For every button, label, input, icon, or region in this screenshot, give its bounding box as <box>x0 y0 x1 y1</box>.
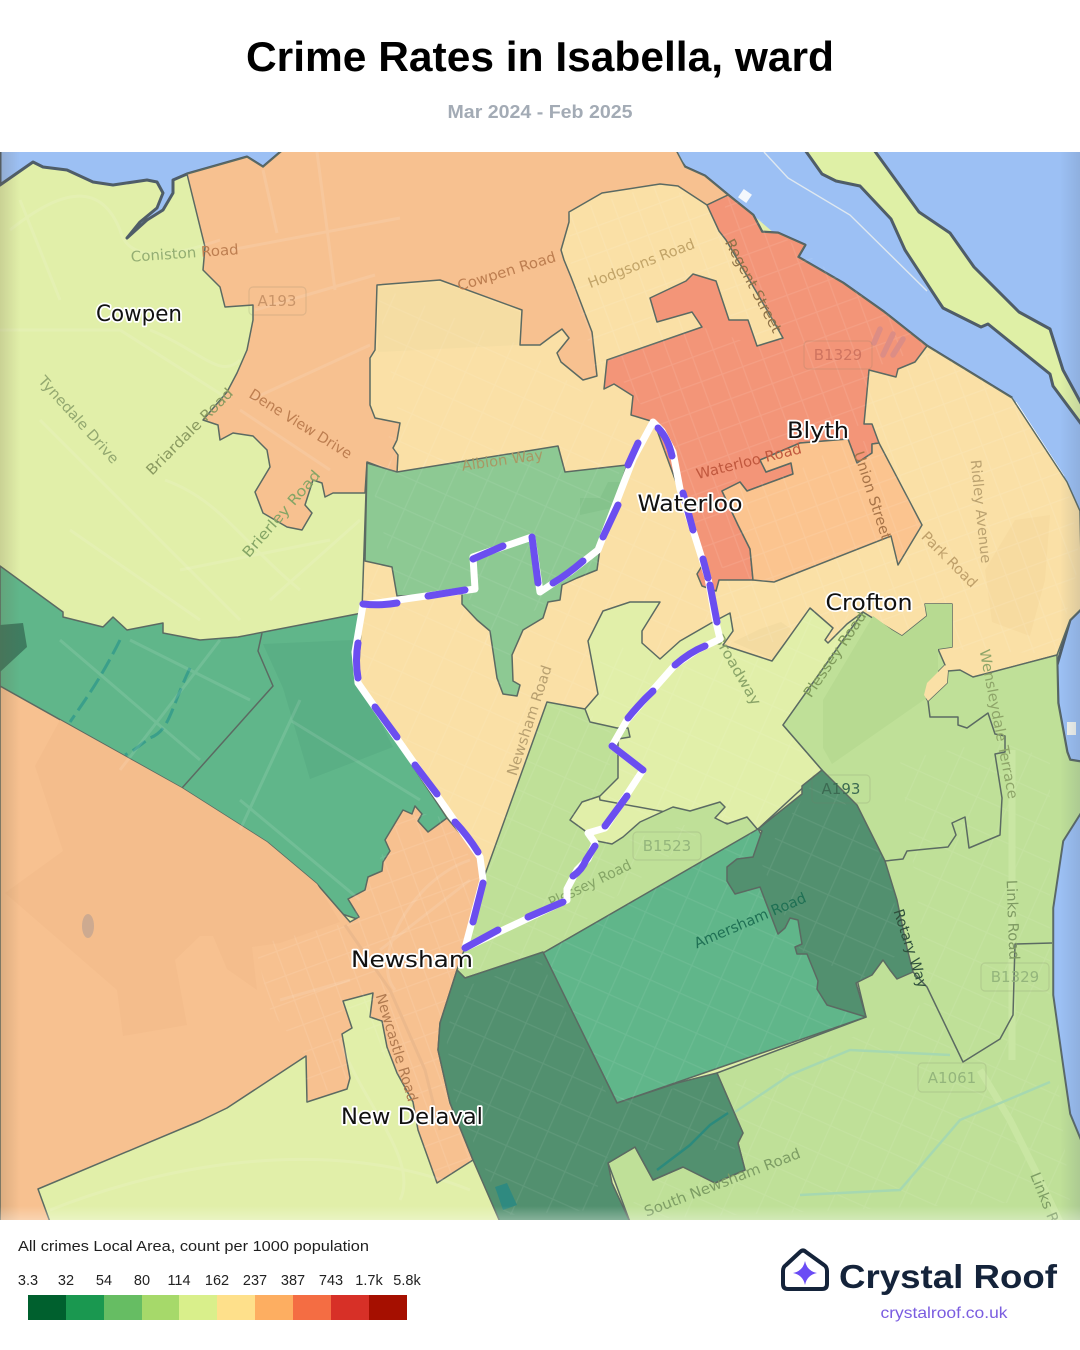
legend tick labels: 743 <box>319 1273 343 1289</box>
road: Union Street: Union Street <box>850 450 894 542</box>
pale darker patch: Crofton <box>733 622 791 660</box>
white outline <box>355 422 720 948</box>
legend tick labels: 114 <box>167 1273 191 1289</box>
region: green Amersham <box>543 829 866 1103</box>
road: Amersham Road: Amersham Road <box>692 891 809 952</box>
road badge: B1329 east: B1329 <box>991 968 1039 986</box>
light green darker block <box>823 604 952 764</box>
darkest west spot <box>0 623 27 672</box>
teal pond <box>495 1183 517 1210</box>
region: orange south-west Newsham <box>0 686 483 1222</box>
road badge: A1061: A1061 <box>928 1069 976 1087</box>
breakwater <box>1015 403 1063 477</box>
notch of pale <box>924 665 948 701</box>
road badge: A193 west <box>249 287 306 315</box>
road: Newsham Road: Newsham Road <box>505 664 556 778</box>
coast line <box>674 152 1012 398</box>
pier block east <box>1067 722 1076 735</box>
region: lime central <box>585 602 863 829</box>
legend tick labels: 387 <box>281 1273 305 1289</box>
region: dark green west wards <box>0 566 450 950</box>
legend tick labels: 1.7k <box>355 1273 383 1289</box>
east dark streets <box>760 770 905 980</box>
boundary inside east region <box>885 701 1005 861</box>
region: orange Cowpen <box>187 150 728 530</box>
legend <box>18 1239 421 1320</box>
water east bottom <box>1053 811 1080 1143</box>
boundary Links road <box>913 943 1052 1062</box>
road badge: A193 east: A193 <box>822 780 860 798</box>
stream south dark <box>657 1113 728 1170</box>
salmon street pattern <box>607 195 927 580</box>
orange road: Newcastle Road band <box>345 925 440 1130</box>
legend tick labels: 162 <box>205 1273 229 1289</box>
road badge: A193 east <box>812 775 870 803</box>
pale darker patch: east park <box>985 515 1050 636</box>
legend tick labels: 5.8k <box>393 1273 421 1289</box>
river: north-west inlet <box>0 150 283 238</box>
map edge vignette left <box>0 152 20 1220</box>
region: salmon Blyth <box>604 195 927 591</box>
legend colour scale <box>28 1295 407 1320</box>
region: pale yellow central and east <box>358 184 1080 880</box>
road: Ridley Avenue: Ridley Avenue <box>967 459 993 564</box>
road badge: B1329 north: B1329 <box>814 346 862 364</box>
light green street pattern <box>620 740 1070 1220</box>
region: light green central south <box>457 702 758 978</box>
place: Blyth: Blyth <box>787 419 849 444</box>
road: Albion Way: Albion Way <box>461 447 545 475</box>
legend title: All crimes Local Area, count per 1000 population <box>18 1239 369 1255</box>
orange pond <box>82 914 94 938</box>
road: Park Road: Park Road <box>918 529 980 591</box>
legend tick labels: 237 <box>243 1273 267 1289</box>
water east lower <box>1057 608 1080 762</box>
region: dark green east <box>727 770 913 1017</box>
pale darker patch: Albion allotments <box>378 282 520 352</box>
road: Broadway: Broadway <box>710 631 764 709</box>
stream west <box>70 640 190 755</box>
place: Cowpen: Cowpen <box>96 302 182 327</box>
road: Newcastle Road: Newcastle Road <box>372 992 420 1104</box>
wordmark: Crystal Roof <box>839 1258 1058 1295</box>
light green streets <box>496 704 606 846</box>
map edge vignette right <box>1060 152 1080 1220</box>
region: dark green south <box>438 952 745 1222</box>
icon: house with star <box>783 1250 827 1289</box>
road: Plessey Road north: Plessey Road <box>801 609 870 701</box>
road badge: A1061 <box>918 1063 986 1092</box>
orange farmland shade <box>60 720 320 888</box>
road badge: B1523 <box>633 832 701 860</box>
legend tick labels: 3.3 <box>18 1273 38 1289</box>
map edge fade bottom <box>0 1206 1080 1220</box>
legend tick labels: 54 <box>96 1273 112 1289</box>
road: Waterloo Road: Waterloo Road <box>695 441 803 483</box>
salmon harbour stripes <box>874 329 903 355</box>
road: Regent Street: Regent Street <box>721 236 784 336</box>
subtitle: date range: Mar 2024 - Feb 2025 <box>448 101 632 122</box>
ward separator <box>182 633 273 788</box>
lime streets <box>625 610 842 811</box>
legend tick labels: 32 <box>58 1273 74 1289</box>
region: light green east <box>608 604 1080 1222</box>
road badge: B1329 north <box>804 341 872 369</box>
website url: crystalroof.co.uk <box>880 1305 1009 1322</box>
road: Briardale Road: Briardale Road <box>144 386 237 479</box>
choropleth map <box>0 150 1080 1222</box>
road: Links Road south: Links Road <box>1026 1170 1071 1251</box>
Newsham street pattern <box>255 810 483 1183</box>
south dark streets <box>445 960 735 1215</box>
orange street pattern <box>722 439 922 582</box>
road: Cowpen Road: Cowpen Road <box>456 250 558 295</box>
place: Waterloo: Waterloo <box>638 492 742 517</box>
mid green streets <box>367 450 620 690</box>
road: Brierley Road: Brierley Road <box>240 468 324 561</box>
place: Crofton: Crofton <box>826 591 912 616</box>
place: Newsham: Newsham <box>351 948 473 973</box>
region: orange Blyth south <box>722 439 922 582</box>
legend tick labels <box>18 1273 421 1289</box>
logo: Crystal Roof <box>783 1250 1058 1322</box>
title: Crime Rates in Isabella, ward <box>246 33 834 80</box>
Amersham streets <box>543 829 866 1103</box>
stream south east <box>800 1082 1050 1195</box>
road badge: B1329 east <box>981 963 1049 991</box>
pale street pattern <box>569 212 1066 635</box>
Links Road band <box>1008 750 1016 1060</box>
A1061 road band <box>980 1070 1060 1222</box>
road: Tynedale Drive: Tynedale Drive <box>34 373 121 467</box>
road: Rotary Way: Rotary Way <box>890 907 930 991</box>
road: Dene View Drive: Dene View Drive <box>246 387 354 463</box>
road badge: B1523: B1523 <box>643 837 691 855</box>
pale street pattern west <box>363 440 398 590</box>
place: New Delaval: New Delaval <box>341 1105 483 1130</box>
ship channel line <box>764 152 927 291</box>
land base: lime wards <box>0 152 1080 1220</box>
legend tick labels: 80 <box>134 1273 150 1289</box>
light street lines <box>0 152 470 1210</box>
road: Links Road: Links Road <box>1003 880 1021 960</box>
mid green darker patch <box>580 482 620 515</box>
pier block <box>738 189 752 203</box>
darker woodland <box>263 640 393 779</box>
road badge: A193 west: A193 <box>258 292 296 310</box>
road: Hodgsons Road: Hodgsons Road <box>586 237 697 292</box>
region: mid green Isabella north <box>365 446 627 696</box>
road: South Newsham Road: South Newsham Road <box>642 1146 803 1220</box>
place labels <box>96 302 912 1130</box>
river east island <box>805 150 1080 425</box>
purple dashes <box>356 428 717 948</box>
road: Coniston Road: Coniston Road <box>130 242 239 266</box>
stream east <box>735 1050 950 1112</box>
road: Wensleydale Terrace: Wensleydale Terrace <box>976 648 1020 800</box>
ward boundary: Isabella <box>355 422 720 948</box>
road labels <box>34 236 1071 1251</box>
river: main channel <box>674 150 1080 530</box>
road: Plessey Road south: Plessey Road <box>546 857 634 911</box>
